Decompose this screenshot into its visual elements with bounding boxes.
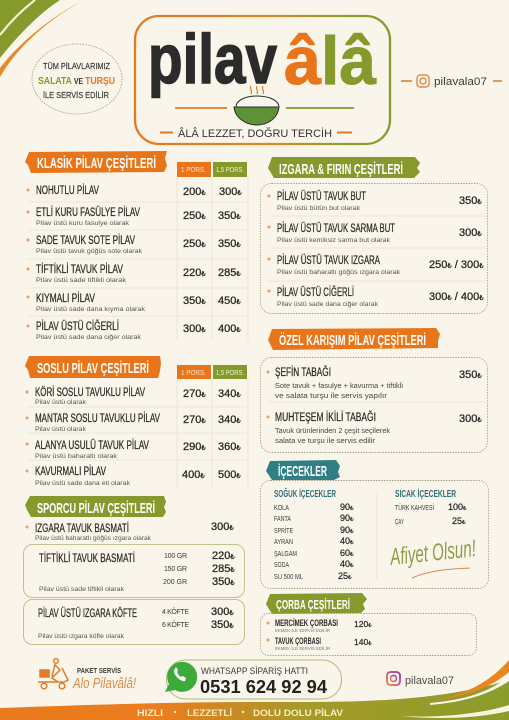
- heading: ozel: [268, 328, 440, 350]
- row: Pilav üstü sade dana eti olarak: [35, 480, 131, 487]
- row: Pilav üstü baharatlı göğüs ızgara olarak: [277, 269, 401, 276]
- row: [26, 320, 241, 341]
- row: Pilav üstü kuru fasulye olarak: [36, 220, 130, 227]
- panel: soslu pilav: [25, 356, 248, 487]
- panel: icecekler: [260, 460, 488, 588]
- heading: sporcu: SPORCU PİLAV ÇEŞİTLERİ: [37, 500, 155, 517]
- row: 300₺: [459, 227, 482, 239]
- heading: klasik: [25, 151, 167, 173]
- row: KÖRİ SOSLU TAVUKLU PİLAV: [35, 386, 145, 399]
- row: Pilav üstü baharatlı göğüs ızgara olarak: [35, 535, 152, 542]
- row: [26, 412, 241, 433]
- row: PİLAV ÜSTÜ CİĞERLİ: [36, 320, 119, 333]
- row: 300₺: [211, 521, 234, 533]
- row: PİLAV ÜSTÜ TAVUK SARMA BUT: [277, 222, 395, 235]
- whatsapp order line: [165, 660, 342, 699]
- icon: rice bowl: [234, 86, 279, 125]
- row: Pilav üstü kemiksiz sarma but olarak: [277, 237, 391, 244]
- row: [26, 439, 241, 460]
- row: IZGARA TAVUK BASMATİ: [35, 522, 129, 535]
- row: KAVURMALI PİLAV: [35, 465, 106, 478]
- logo: [135, 16, 390, 144]
- band slogan: [137, 708, 344, 719]
- row: EKMEK İLE SERVİS EDİLİR: [275, 627, 331, 633]
- row: 270₺: [183, 414, 206, 426]
- row: 120₺: [354, 619, 372, 629]
- heading: izgara: IZGARA & FIRIN ÇEŞİTLERİ: [279, 161, 403, 178]
- handwritten note: afiyet olsun: [388, 535, 477, 578]
- row: 350₺: [183, 295, 206, 307]
- round note: salad and pickle: SALATA VE TURŞU: [38, 76, 115, 87]
- row: [268, 222, 482, 244]
- round note: salad and pickle: TÜM PİLAVLARIMIZ: [43, 62, 110, 71]
- row: Pilav üstü sade dana kıyma olarak: [36, 306, 146, 313]
- row: 500₺: [218, 469, 241, 481]
- row: 350₺: [218, 238, 241, 250]
- row: [26, 465, 241, 487]
- row: Pilav üstü tavuk göğüs sote olarak: [36, 248, 143, 255]
- delivery promo: [38, 659, 137, 692]
- row: [266, 618, 372, 633]
- icon: instagram: [417, 75, 429, 87]
- cold drinks: SOĞUK İÇECEKLER: [274, 487, 336, 500]
- hot drinks: 25₺: [452, 516, 466, 526]
- heading: corba: ÇORBA ÇEŞİTLERİ: [276, 597, 350, 612]
- panel: ozel karisim: [260, 328, 488, 452]
- row: PİLAV ÜSTÜ TAVUK BUT: [277, 190, 366, 203]
- hot drinks: [395, 487, 467, 526]
- whatsapp order line: 0531 624 92 94: [200, 677, 327, 697]
- row: Pilav üstü sade dana ciğer olarak: [36, 334, 142, 341]
- logo wordmark: ala: lâ: [321, 23, 376, 99]
- icon: delivery scooter: [38, 659, 68, 689]
- instagram handle bottom: pilavala07: [405, 675, 454, 687]
- row: 220₺: [183, 267, 206, 279]
- panel: sporcu pilav: [24, 496, 244, 644]
- row: [26, 292, 241, 313]
- logo wordmark: pilav: pilav: [148, 20, 277, 98]
- row: MANTAR SOSLU TAVUKLU PİLAV: [35, 412, 160, 425]
- card: tiftikli basmati: 220₺: [212, 550, 235, 562]
- row: [266, 411, 482, 445]
- heading: soslu: [25, 356, 161, 378]
- row: [268, 286, 484, 308]
- row: 300₺ / 400₺: [429, 291, 484, 303]
- card: izgara kofte: 350₺: [211, 619, 234, 631]
- delivery promo: PAKET SERVİS: [77, 666, 121, 675]
- row: 140₺: [354, 637, 372, 647]
- card: tiftikli basmati: 285₺: [212, 563, 235, 575]
- row: [268, 254, 484, 276]
- row: Pilav üstü baharatlı olarak: [35, 453, 118, 460]
- cold drinks: FANTA: [274, 516, 291, 523]
- card: tiftikli basmati: 150 GR: [164, 566, 187, 573]
- row: 360₺: [218, 441, 241, 453]
- portion headers: 1 PORS.: [181, 167, 206, 174]
- card: izgara kofte: 300₺: [211, 606, 234, 618]
- row: [26, 263, 241, 284]
- row: [26, 184, 242, 198]
- cold drinks: AYRAN: [274, 539, 293, 546]
- heading: ozel: ÖZEL KARIŞIM PİLAV ÇEŞİTLERİ: [279, 332, 426, 349]
- row: 300₺: [219, 186, 242, 198]
- logo wordmark: ala: [284, 23, 376, 99]
- corner swoosh: top left: [0, 0, 84, 77]
- row: Pilav üstü olarak: [35, 399, 87, 406]
- row: 350₺: [459, 195, 482, 207]
- row: TAVUK ÇORBASI: [275, 636, 321, 647]
- row: [26, 234, 241, 255]
- cold drinks: 90₺: [340, 525, 354, 535]
- heading: izgara: [268, 157, 420, 178]
- row: ve salata turşu ile servis yapılır: [275, 393, 388, 400]
- card: izgara kofte: 6 KÖFTE: [162, 621, 189, 629]
- heading: klasik: KLASİK PİLAV ÇEŞİTLERİ: [37, 155, 156, 172]
- row: 340₺: [218, 388, 241, 400]
- card: tiftikli basmati: 200 GR: [163, 579, 187, 586]
- round note: salad and pickle: [32, 44, 122, 114]
- heading: sporcu: [25, 496, 166, 517]
- panel: klasik pilav: [25, 151, 248, 341]
- card: izgara kofte: [24, 600, 244, 644]
- logo wordmark: ala: â: [284, 23, 321, 99]
- cold drinks: SPRİTE: [274, 526, 293, 535]
- logo divider lines: [175, 107, 354, 109]
- row: [26, 206, 241, 227]
- hot drinks: ÇAY: [395, 519, 404, 526]
- row: PİLAV ÜSTÜ CİĞERLİ: [277, 286, 354, 299]
- row: 270₺: [183, 388, 206, 400]
- cold drinks: KOLA: [274, 505, 289, 512]
- hot drinks: TÜRK KAHVESİ: [395, 503, 434, 512]
- hot drinks: 100₺: [448, 502, 467, 512]
- heading: icecekler: [266, 460, 340, 480]
- row: [268, 190, 482, 212]
- band slogan: DOLU DOLU PİLAV: [253, 708, 344, 719]
- card: tiftikli basmati: 100 GR: [164, 553, 187, 560]
- row: [266, 636, 372, 651]
- heading: icecekler: İÇECEKLER: [278, 463, 327, 480]
- bottom band: [0, 660, 509, 720]
- row: Pilav üstü sade tiftikli olarak: [36, 277, 127, 284]
- card: tiftikli basmati: Pilav üstü sade tiftikli olarak: [39, 586, 125, 593]
- row: 250₺ / 300₺: [429, 259, 484, 271]
- cold drinks: 60₺: [340, 548, 354, 558]
- portion headers: [177, 162, 247, 177]
- row: [26, 521, 234, 542]
- cold drinks: SU 500 ML: [274, 574, 303, 581]
- instagram handle top: pilavala07: [434, 76, 487, 88]
- card: tiftikli basmati: 350₺: [212, 576, 235, 588]
- row: Sote tavuk + fasulye + kavurma + tiftikli: [275, 383, 403, 390]
- portion headers: [177, 365, 247, 379]
- row: KIYMALI PİLAV: [36, 292, 95, 305]
- panel: izgara firin: [260, 157, 488, 314]
- row: 340₺: [218, 414, 241, 426]
- cold drinks: 90₺: [340, 513, 354, 523]
- cold drinks: SODA: [274, 562, 289, 569]
- row: NOHUTLU PİLAV: [36, 184, 99, 197]
- row: 350₺: [459, 369, 482, 381]
- row: ŞEFİN TABAĞI: [275, 366, 331, 379]
- row: EKMEK İLE SERVİS EDİLİR: [275, 645, 331, 651]
- portion headers: 1,5 PORS.: [216, 370, 244, 377]
- instagram handle bottom: [387, 672, 454, 687]
- row: ETLİ KURU FASÜLYE PİLAV: [36, 206, 140, 219]
- band slogan: HIZLI: [137, 708, 163, 719]
- row: PİLAV ÜSTÜ TAVUK IZGARA: [277, 254, 380, 267]
- logo frame: [135, 16, 390, 144]
- instagram handle top: [401, 75, 502, 88]
- row: SADE TAVUK SOTE PİLAV: [36, 234, 135, 247]
- row: 450₺: [218, 295, 241, 307]
- cold drinks: 40₺: [340, 559, 354, 569]
- row: MUHTEŞEM İKİLİ TABAĞI: [275, 411, 376, 424]
- row: 350₺: [218, 210, 241, 222]
- row: 290₺: [183, 441, 206, 453]
- row: Pilav üstü olarak: [35, 426, 87, 433]
- card: izgara kofte: Pilav üstü ızgara köfte olarak: [38, 633, 125, 640]
- row: 300₺: [459, 413, 482, 425]
- row: [26, 386, 241, 406]
- cold drinks: [274, 487, 354, 581]
- heading: corba: [266, 593, 367, 614]
- cold drinks: 40₺: [340, 536, 354, 546]
- portion headers: 1,5 PORS.: [216, 167, 244, 174]
- heading: soslu: SOSLU PİLAV ÇEŞİTLERİ: [37, 360, 149, 377]
- row: 400₺: [218, 323, 241, 335]
- hot drinks: SICAK İÇECEKLER: [395, 487, 456, 500]
- row: TİFTİKLİ TAVUK PİLAV: [36, 263, 123, 276]
- row: 300₺: [183, 323, 206, 335]
- card: izgara kofte: PİLAV ÜSTÜ IZGARA KÖFTE: [38, 607, 137, 620]
- band slogan: LEZZETLİ: [187, 708, 232, 719]
- row: Tavuk ürünlerinden 2 çeşit seçilerek: [275, 428, 391, 435]
- round note: salad and pickle: İLE SERVİS EDİLİR: [43, 91, 109, 100]
- card: tiftikli basmati: [24, 544, 244, 598]
- row: salata ve turşu ile servis edilir: [275, 438, 376, 445]
- row: 400₺: [182, 469, 205, 481]
- cold drinks: ŞALGAM: [274, 551, 297, 558]
- card: izgara kofte: 4 KÖFTE: [162, 608, 189, 616]
- icon: whatsapp: [165, 662, 197, 692]
- delivery promo: Alo Pilavâlâ!: [72, 675, 137, 692]
- cold drinks: 25₺: [338, 571, 352, 581]
- row: 200₺: [183, 186, 206, 198]
- panel: corba: [260, 593, 476, 656]
- row: Pilav üstü bütün but olarak: [277, 205, 361, 212]
- cold drinks: 90₺: [340, 502, 354, 512]
- card: tiftikli basmati: TİFTİKLİ TAVUK BASMATİ: [39, 552, 135, 565]
- whatsapp order line: WHATSAPP SİPARİŞ HATTI: [201, 666, 308, 676]
- row: MERCİMEK ÇORBASI: [275, 618, 338, 629]
- portion headers: 1 PORS.: [181, 370, 206, 377]
- row: 250₺: [183, 238, 206, 250]
- row: 285₺: [218, 267, 241, 279]
- row: Pilav üstü sade dana ciğer olarak: [277, 301, 379, 308]
- row: 250₺: [183, 210, 206, 222]
- row: ALANYA USULÜ TAVUK PİLAV: [35, 439, 149, 452]
- logo tagline: ÂLÂ LEZZET, DOĞRU TERCİH: [178, 127, 332, 140]
- row: [266, 366, 482, 400]
